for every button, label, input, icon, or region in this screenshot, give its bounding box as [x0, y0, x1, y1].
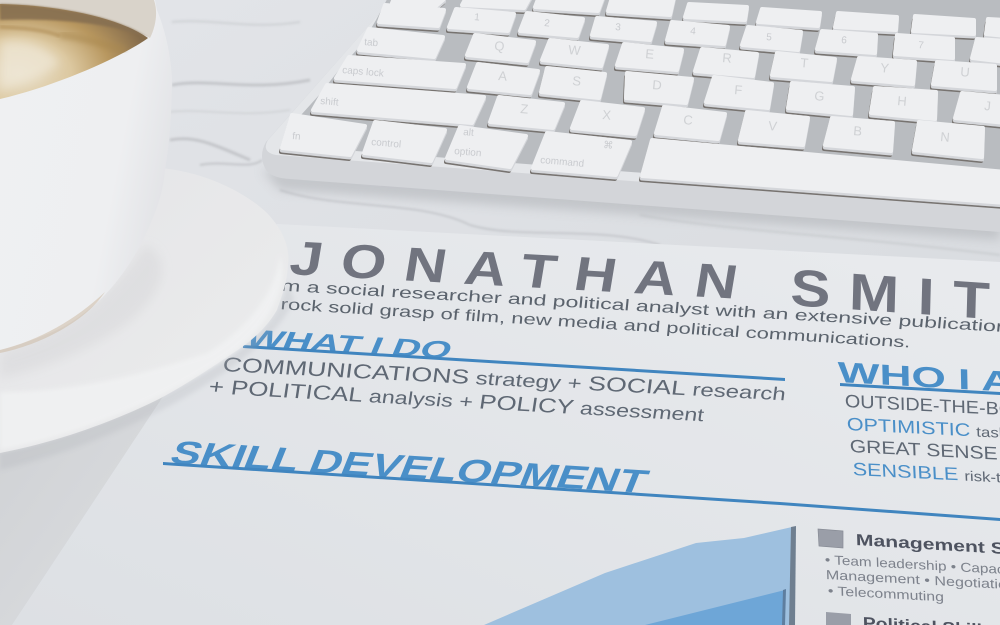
- keyboard: [262, 0, 1000, 240]
- key legends: ⌘: [603, 140, 614, 152]
- key legends: E: [645, 46, 655, 62]
- key legends: caps lock: [342, 65, 385, 80]
- key legends: A: [498, 68, 508, 84]
- key legends: 5: [766, 32, 773, 44]
- name title: [290, 242, 990, 318]
- key legends: C: [683, 112, 693, 128]
- legend: management skills: • Telecommuting: [828, 583, 944, 604]
- key legends: option: [454, 146, 482, 159]
- who I am list: [845, 392, 1000, 489]
- key well: [290, 0, 1000, 200]
- cup inner wall: [0, 0, 156, 38]
- key legends: Q: [494, 38, 505, 54]
- saucer: [0, 168, 288, 453]
- key legends: 6: [841, 35, 848, 47]
- key legends: B: [853, 123, 863, 139]
- key legends: V: [768, 118, 778, 134]
- intro text: [282, 282, 1000, 348]
- key legends: tab: [364, 37, 379, 49]
- name title: JONATHAN: [286, 231, 760, 310]
- key legends: D: [652, 77, 662, 93]
- what I do text: COMMUNICATIONS strategy + SOCIAL research: [221, 354, 787, 405]
- key legends: J: [984, 98, 992, 114]
- legend: management skills: • Team leadership • Capacity: [825, 552, 1000, 578]
- key legends: 4: [690, 26, 697, 38]
- what I do text: [210, 358, 784, 422]
- key legends: shift: [320, 96, 339, 109]
- skill development heading: [163, 435, 1000, 521]
- coffee: [0, 4, 148, 99]
- resume sheet: [12, 224, 1000, 625]
- who I am heading: WHO I AM: [838, 357, 1000, 401]
- key legends: Z: [520, 101, 529, 117]
- key legends: control: [371, 137, 402, 151]
- key legends: alt: [463, 127, 474, 139]
- area chart: [484, 526, 796, 625]
- cast shadow: [0, 280, 294, 470]
- key legends: Y: [880, 60, 890, 76]
- what I do heading: [243, 330, 785, 381]
- key legends: S: [572, 73, 582, 89]
- skill development heading: SKILL DEVELOPMENT: [165, 435, 653, 501]
- key legends: N: [940, 129, 950, 145]
- key legends: H: [897, 93, 907, 109]
- paper: [12, 224, 1000, 625]
- cup body: [0, 0, 172, 350]
- key legends: command: [540, 155, 584, 170]
- legend: management skills: [818, 529, 1000, 604]
- coffee cup and saucer: [0, 0, 294, 470]
- key legends: T: [800, 55, 809, 71]
- keyboard body: [262, 0, 1000, 232]
- what I do heading: WHAT I DO: [242, 325, 457, 364]
- key legends: 7: [918, 40, 925, 52]
- key legends: 3: [615, 22, 622, 34]
- key legends: fn: [292, 131, 301, 143]
- key legends: F: [734, 82, 743, 98]
- key legends: [292, 12, 992, 170]
- name title: SMITH: [790, 259, 1000, 336]
- key legends: R: [722, 50, 732, 66]
- cup shadow on saucer: [0, 245, 162, 378]
- legend: management skills: Management Skills: [856, 532, 1000, 560]
- intro text: a rock solid grasp of film, new media and political communications.: [262, 295, 911, 352]
- key legends: 2: [544, 18, 551, 30]
- key legends: U: [960, 64, 970, 80]
- key legends: X: [602, 107, 612, 123]
- legend: management skills: Management • Negotiation: [826, 567, 1000, 592]
- what I do text: + POLITICAL analysis + POLICY assessment: [207, 376, 706, 426]
- key legends: 1: [474, 12, 481, 24]
- legend swatch: [818, 529, 843, 548]
- keyboard shadow: [262, 170, 1000, 240]
- key legends: G: [814, 88, 825, 104]
- intro text: I'm a social researcher and political analyst with an extensive publication record: [270, 277, 1000, 340]
- legend: political skills: [826, 612, 993, 625]
- keys: [282, 0, 1000, 203]
- key legends: W: [568, 42, 582, 58]
